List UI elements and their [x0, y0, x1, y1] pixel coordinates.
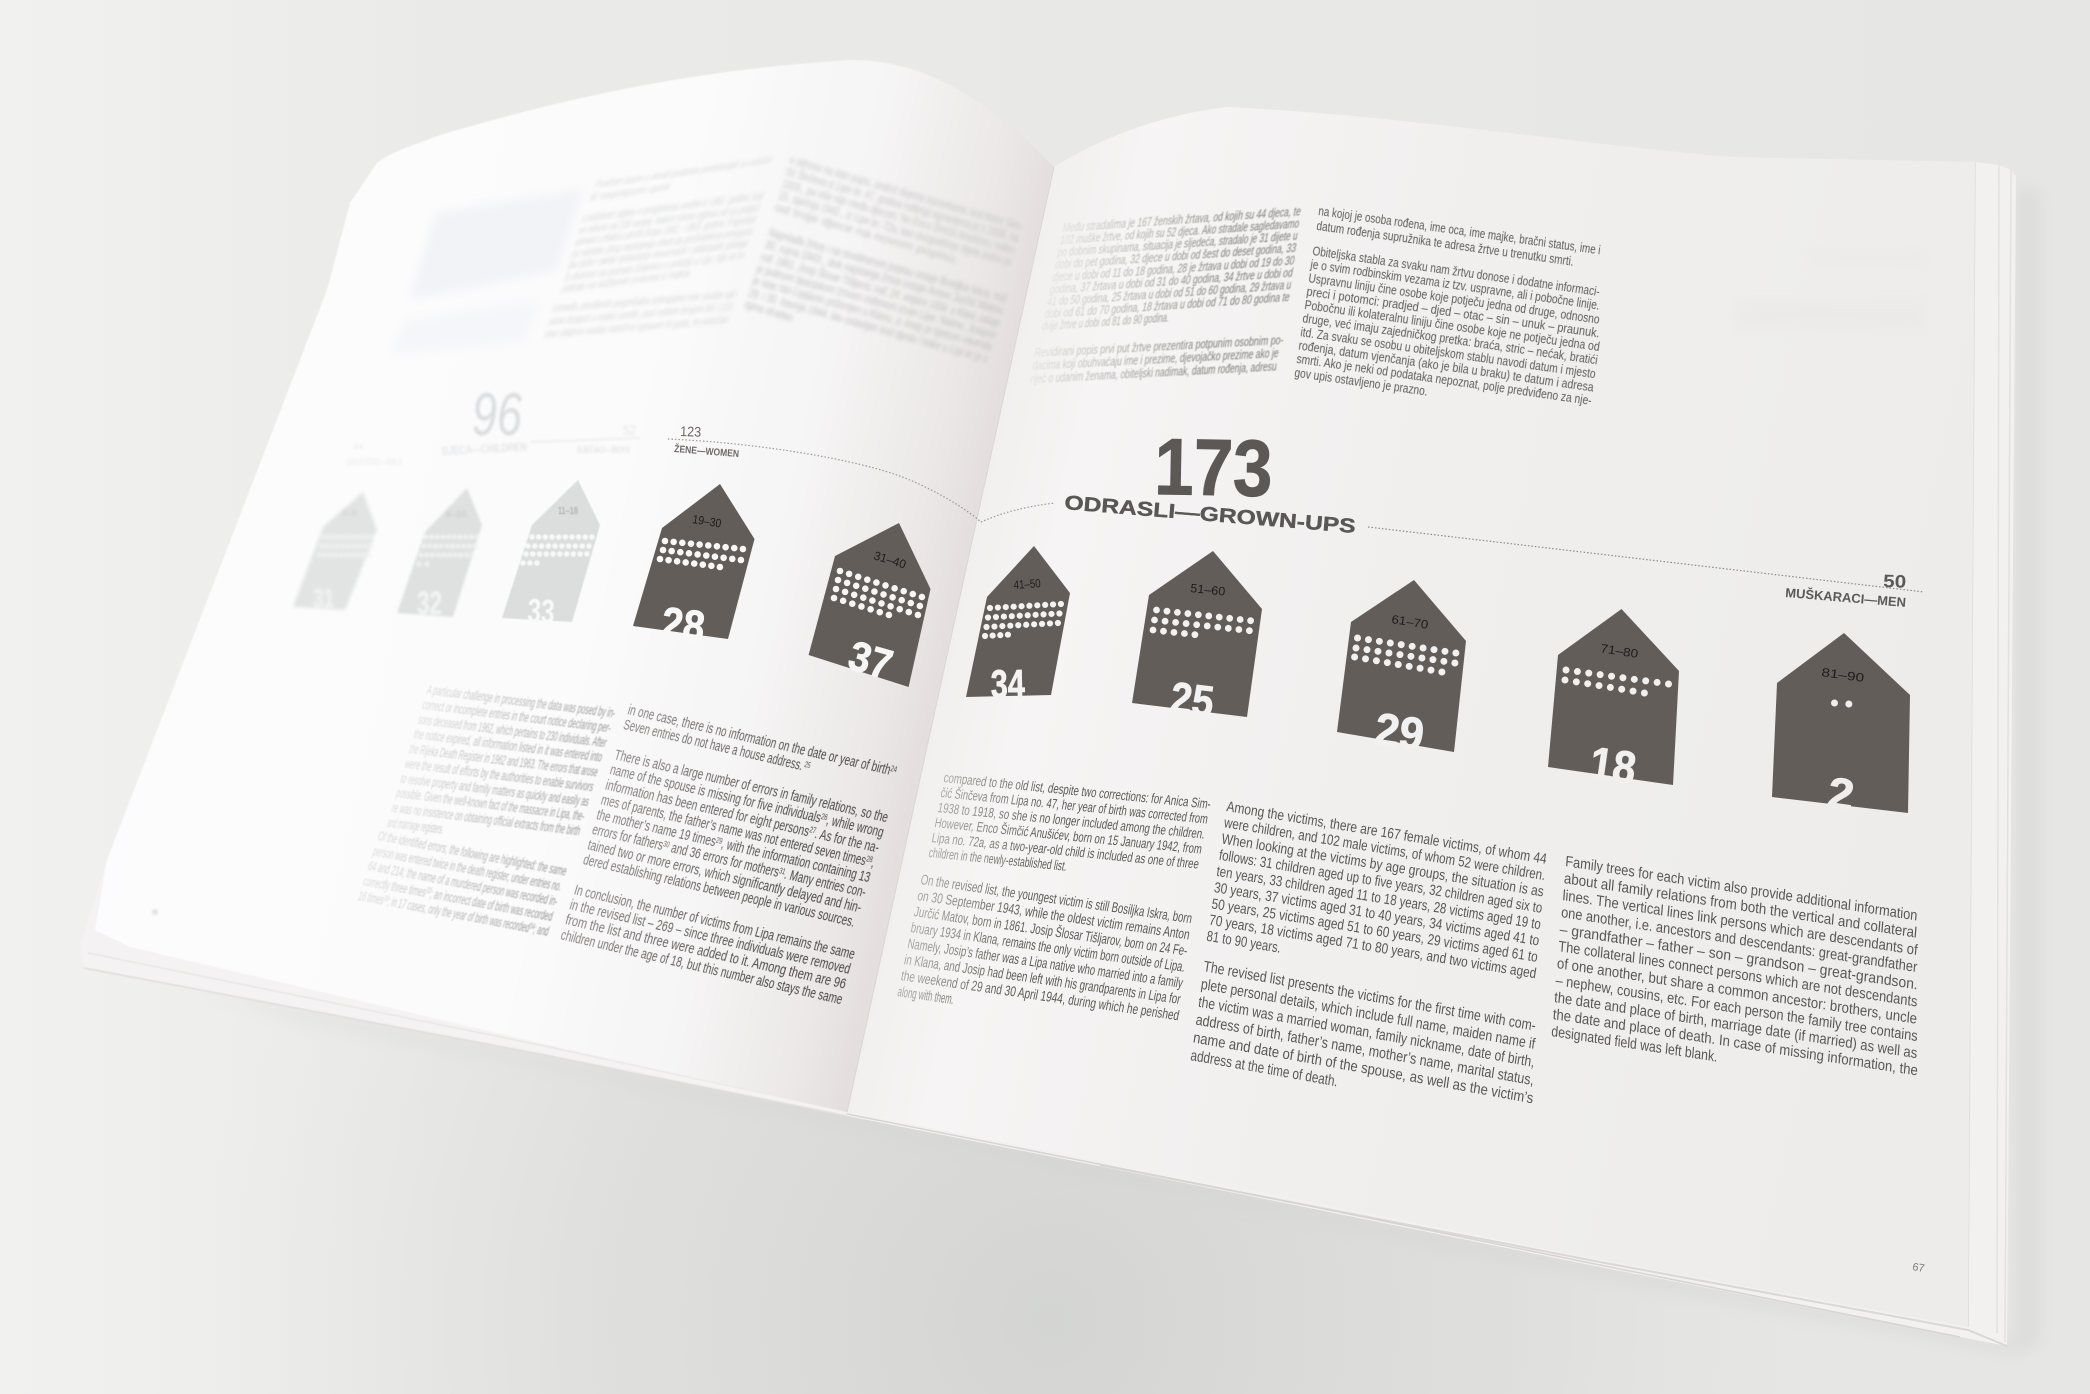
text block: right page column two, paragraph two: address at the time of death.: [1189, 1047, 1339, 1090]
text block: upper right page column one, paragraph one: dobi od 61 do 70 godina, 18 žrtava u dobi od 71 do 80 godina te: [1043, 290, 1291, 321]
text block: left page column two: 29: [715, 836, 724, 846]
house: ages 61-70, 29 victims: [1337, 580, 1466, 761]
text block: left page column two: 27: [808, 825, 817, 836]
text block: right page column one, paragraph one: compared to the old list, despite two corrections: for Anica Sim-: [942, 770, 1212, 812]
text block: upper right page column two, paragraph two: je o svim rodbinskim vezama iz tzv. uspravne, ali i pobočne linije.: [1309, 258, 1601, 313]
label: men: MUŠKARACI—MEN: [1785, 585, 1907, 610]
text block: upper right page column two, paragraph two: rođenja, datum vjenčanja (ako je bila u braku) te datum i adresa: [1298, 339, 1595, 395]
text block: right page column one, paragraph one: 1938 to 1918, so she is no longer included among the children.: [936, 800, 1206, 842]
text block: right page column one, paragraph two: bruary 1934 in Klana, remains the only victim born outside of Lipa.: [909, 920, 1187, 976]
label: women: ŽENE—WOMEN: [674, 442, 740, 460]
house: ages 31-40, 37 victims: 37: [844, 631, 898, 689]
text block: left page column two: the mother’s name 19 times: [595, 807, 772, 863]
text block: right page column three: one another, i.e. ancestors and descendants: great-grandfather: [1560, 904, 1918, 976]
text block: right page column one, paragraph one: Lipa no. 72a, as a two-year-old child is included as one of three: [930, 830, 1200, 872]
text block: right page column three: [1551, 853, 1931, 1097]
text block: blurred upper left column, paragraph three: [543, 287, 740, 341]
text block: blurred upper left column, paragraph three: ime ubijene osobe netočno upisano tri puta, te netočan: [543, 314, 730, 341]
text block: right page column one, paragraph two: On the revised list, the youngest victim is still Bosiljka Iskra, born: [919, 872, 1193, 927]
text block: upper right page column one, paragraph two: riječ o udanim ženama, obiteljski nadimak, datum rođenja, adresu: [1030, 359, 1278, 386]
house: ages 41-50, 34 victims: 41–50: [1013, 576, 1041, 592]
text block: right page column one, paragraph one: However, Enco Šimčić Anušićev, born on 15 January 1942, from: [933, 815, 1203, 857]
text block: blurred upper left column, paragraph two: što brže i lakše rješavanje imovinskih i obiteljskih pitanja.: [566, 237, 751, 272]
text block: blurred upper middle column, paragraph two: njima stradao.: [743, 297, 797, 325]
stat: 52 boys: 52: [623, 422, 636, 438]
spine crease: [847, 167, 1054, 1112]
heading: left-page totals, blurred: [347, 381, 640, 467]
text block: right page column two, paragraph one: follows: 31 children aged up to five years, 32 children aged six to: [1218, 848, 1543, 917]
house: ages 61-70, 29 victims: 29: [1372, 702, 1427, 761]
text block: left page column two: children under the age of 18, but this number also stays the same: [559, 927, 844, 1008]
house: ages 0-5, 31 victims: [293, 492, 377, 613]
text block: upper right page column one, paragraph one: [1041, 204, 1309, 333]
text block: left page column one, paragraph one: possible. Given the well-known fact of the massacre in Lipa, the-: [394, 786, 587, 824]
text block: upper right page column two, paragraph two: Pobočnu ili kolateralnu liniju čine osobe koje ne potječu jedna od: [1304, 298, 1601, 354]
text block: blurred upper left column, paragraph two: [560, 190, 765, 296]
text block: right page column two, paragraph two: plete personal details, which include full name, maiden name if: [1200, 976, 1537, 1053]
text block: left page column two: 30: [662, 840, 671, 850]
panel: left page: [95, 60, 1054, 1112]
text block: blurred left-page grey block: [391, 190, 583, 355]
stat: 123 women: [674, 423, 740, 460]
text block: right page column three: designated field was left blank.: [1551, 1023, 1718, 1066]
text block: upper right page column two, paragraph two: [1293, 244, 1609, 422]
text block: right page column one, paragraph two: on 30 September 1943, while the oldest victim remains Anton: [916, 888, 1191, 943]
house: ages 51-60, 25 victims: 51–60: [1190, 581, 1226, 599]
text block: blurred upper left column, paragraph two: u sudskom oglasu o proglašenju umrlim iz 1962. godine, koji: [580, 190, 765, 225]
house: ages 41-50, 34 victims: [966, 546, 1070, 707]
text block: right page column two, paragraph one: 81 to 90 years.: [1205, 929, 1282, 957]
text block: right page column two, paragraph one: [1205, 799, 1555, 999]
text block: blurred upper left column, paragraph one: [588, 153, 774, 204]
house: ages 71-80, 18 victims: 71–80: [1600, 641, 1640, 661]
text block: upper right page column one, paragraph one: 41 do 50 godina, 25 žrtava u dobi od 51 do 60 godina, 29 žrtava u: [1046, 278, 1293, 309]
text block: upper right page column one, paragraph one: 102 muške žrtve, od kojih su 52 djeca. Ako stradale sagledavamo: [1059, 217, 1301, 247]
text block: upper right page column two, paragraph two: preci i potomci: pradjed – djed – otac – sin – unuk – praunuk.: [1306, 285, 1601, 340]
house: ages 31-40, 37 victims: 31–40: [872, 548, 908, 572]
text block: upper right page column one, paragraph one: po dobnim skupinama, situacija je sljedeća, stradalo je 31 dijete u: [1056, 229, 1299, 260]
text block: right page column two, paragraph one: ten years, 33 children aged 11 to 18 years, 28 victims aged 19 to: [1215, 864, 1542, 933]
text block: right page column one, paragraph one: čić Šinčeva from Lipa no. 47, her year of birth was corrected from: [939, 785, 1209, 827]
rule under children total: [530, 438, 640, 442]
text block: right page column three: – grandfather – father – son – grandson – great-grandson.: [1559, 921, 1918, 993]
text block: left page column one, paragraph one: [385, 682, 618, 853]
text block: left page column two: [559, 702, 911, 1008]
text block: right page column three: the date and place of death. In case of missing information, the: [1552, 1006, 1919, 1080]
text block: upper right page column one, paragraph two: [1030, 333, 1285, 386]
text block: right page column one, paragraph two: the weekend of 29 and 30 April 1944, during which he perished: [899, 968, 1181, 1024]
text block: left page column one, paragraph two: 34: [529, 922, 536, 931]
text block: left page column two: In conclusion, the number of victims from Lipa remains the same: [572, 882, 857, 963]
text block: upper right page column two, paragraph one: datum rođenja supružnika te adresa žrtve u trenutku smrti.: [1316, 219, 1574, 269]
heading: 173 grown-ups: [1064, 422, 1356, 538]
text block: left page column two: tained two or more errors, which significantly delayed and hin-: [586, 837, 863, 916]
house: ages 11-18, 33 victims: 33: [527, 592, 556, 631]
house: ages 6-10, 32 victims: 6–10: [446, 509, 466, 519]
text block: left page column one, paragraph two: 16 times: [356, 888, 410, 912]
page number: blurred left folio: [152, 909, 158, 915]
text block: upper right page column two, paragraph two: druge, već imaju zajedničkog pretka: braća, stric – nećak, bratići: [1302, 312, 1599, 368]
label: boys: DJEČACI—BOYS: [577, 444, 630, 455]
text block: left page column two: . Many entries con-: [782, 867, 868, 901]
text block: right page column three: lines. The vertical lines link persons which are descendants of: [1562, 887, 1919, 959]
text block: left page column one, paragraph two: 32: [425, 886, 433, 896]
text block: right page column two, paragraph two: the victim was a married woman, family nickname, date of birth,: [1197, 994, 1536, 1071]
label: girls: DJEVOJČICE—GIRLS: [347, 456, 402, 467]
text block: left page column one, paragraph two: ; and: [532, 922, 551, 939]
text block: left page column one, paragraph one: correct or incomplete entries in the court notice declaring per-: [421, 697, 613, 735]
cast shadow of book: [200, 185, 2040, 1355]
text block: blurred upper middle column, paragraph one: [773, 152, 1024, 281]
text block: blurred upper left column, paragraph two: se odnosi na 230 osoba. Nakon isteka oglasa svi su podaci: [577, 201, 761, 237]
house: ages 19-30, 28 victims: 19–30: [692, 512, 723, 531]
page number: 67: 67: [1911, 1261, 1925, 1275]
text block: blurred upper left column, paragraph three: Između utvrđenih pogrešaka izdvajamo iste osobe upi-: [551, 287, 740, 315]
text block: upper right page column one, paragraph one: dvije žrtve u dobi od 81 do 90 godina.: [1041, 311, 1171, 333]
text block: blurred upper left column, paragraph one: Poseban izazov u obradi podataka predstavljali su netočni: [593, 153, 774, 191]
text block: blurred upper middle column, paragraph one: od troje djece na novom popisu.: [773, 200, 960, 267]
text block: left page column one, paragraph one: re was no insistence on obtaining official extracts from the birth: [390, 800, 582, 838]
house: ages 81-90, 2 victims: 2: [1825, 768, 1857, 821]
text block: upper right page column one, paragraph one: godina, 37 žrtava u dobi od 31 do 40 godina, 34 žrtve u dobi od: [1048, 266, 1294, 296]
house: ages 0-5, 31 victims: 31: [313, 583, 334, 613]
house: ages 19-30, 28 victims: [633, 484, 754, 652]
text block: left page column two: 26: [820, 812, 829, 822]
house: ages 19-30, 28 victims: 28: [659, 598, 707, 652]
text block: blurred upper left column, paragraph one: ili nepotpuni upisi: [588, 179, 673, 204]
text block: left page column two: dered establishing relations between people in various sources.: [581, 852, 857, 931]
text block: right page column three: of one another, but share a common ancestor: brothers, uncle: [1556, 955, 1918, 1028]
house: ages 31-40, 37 victims: [809, 523, 930, 689]
text block: blurred upper middle column, paragraph one: čić Šinčeva iz Lipe br. 47, godina rođenja ispravljena je s 1938. na: [784, 164, 1021, 245]
text block: blurred upper middle column, paragraph two: Najmlađa žrtva i na revidiranom popisu ostaje Bosiljka Iskra, rođ.: [767, 225, 1011, 306]
house: ages 81-90, 2 victims: [1772, 633, 1910, 821]
text block: left page column one, paragraph two: ; an incorrect date of birth was recorded: [428, 886, 555, 924]
text block: left page column two: and 36 errors for mothers: [666, 840, 781, 881]
text block: right page column two, paragraph two: [1189, 958, 1545, 1125]
text block: upper right page column two, paragraph one: na kojoj je osoba rođena, ime oca, ime majke, bračni status, ime i: [1318, 204, 1601, 257]
text block: blurred upper left column, paragraph three: sane dvaput u matici umrlih, pod rednim brojem 64 i 214,: [547, 300, 736, 328]
text block: right page column one, paragraph two: along with them.: [896, 984, 955, 1008]
house: ages 51-60, 25 victims: [1132, 551, 1262, 727]
text block: left page column one, paragraph two: Of the identified errors, the following are highlighted: the same: [376, 828, 569, 879]
house: ages 41-50, 34 victims: 34: [990, 662, 1026, 707]
panel: right page: [847, 107, 1975, 1327]
text block: left page column two: information has been entered for eight persons: [603, 777, 898, 860]
text block: right page column three: The collateral lines connect persons which are not descendants: [1558, 938, 1918, 1011]
text block: right page column two, paragraph one: 50 years, 25 victims aged 51 to 60 years, 29 victims aged 61 to: [1210, 896, 1539, 966]
text block: right page column two, paragraph two: address of birth, father’s name, mother’s name, marital status,: [1195, 1012, 1535, 1089]
text block: upper right page column one, paragraph one: dobi do pet godina, 32 djece u dobi od šest do deset godina, 33: [1054, 241, 1298, 272]
text block: left page column one, paragraph two: ; in 17 cases, only the year of birth was recorded: [386, 894, 532, 935]
text block: left page column two: , with the information containing 13: [719, 836, 872, 886]
text block: left page column one, paragraph one: to resolve property and family matters as quickly and easily as: [399, 771, 591, 809]
text block: right page column two, paragraph one: were children, and 102 male victims, of whom 52 were children.: [1222, 815, 1546, 884]
text block: left page column two: in the revised list – 269 – since three individuals were removed: [568, 897, 852, 978]
house: ages 81-90, 2 victims: 81–90: [1821, 665, 1866, 685]
text block: right page column three: about all family relations from both the vertical and collateral: [1563, 870, 1918, 942]
text block: left page column one, paragraph one: were the result of efforts by the authorities to enable survivors: [403, 756, 596, 794]
text block: left page column one, paragraph one: and marriage registers.: [386, 815, 446, 837]
text block: blurred upper left column, paragraph two: upisani u Maticu umrlih Rupa 1962. i 1963. godine. Pogreške: [573, 213, 758, 249]
stat: 173: 173: [1154, 422, 1273, 513]
text block: upper right page column two, paragraph two: smrti. Ako je neki od podataka nepoznat, polje predviđeno za nje-: [1296, 352, 1593, 408]
text block: left page column two: in one case, there is no information on the date or year of birth: [626, 702, 1016, 807]
text block: blurred upper middle column, paragraph two: je jedinom lipanjskom žrtvom rođenom izvan Lipe. Naime, Josipov: [754, 261, 998, 342]
text block: left page column two: Seven entries do not have a house address.: [621, 717, 900, 796]
text block: right page column three: – nephew, cousins, etc. For each person the family tree contains: [1555, 972, 1919, 1045]
text block: left page column one, paragraph one: sons deceased from 1962, which pertains to 230 individuals. After: [416, 712, 609, 750]
text block: upper right page column two, paragraph two: Uspravnu liniju čine osobe koje potječu jedna od druge, odnosno: [1308, 271, 1601, 327]
text block: blurred upper middle column, paragraph one: 1918., pa više nije među djecom. No Enco Šimčić Anušićev, rođen: [781, 176, 1017, 257]
stat: 50 men: [1785, 571, 1907, 610]
text block: left page column two: . As for the na-: [813, 826, 881, 856]
house: ages 11-18, 33 victims: 11–18: [558, 506, 578, 517]
text block: blurred upper middle column, paragraph two: [742, 225, 1011, 378]
house: ages 71-80, 18 victims: [1548, 609, 1679, 794]
text block: left page column one, paragraph two: [356, 828, 571, 939]
page stack under left page: [80, 860, 847, 1116]
text block: blurred upper middle column, paragraph two: 29. i 30. travnja 1944. bio ostavljen kod djeda i bake u Lipi te je s: [747, 285, 990, 366]
text block: left page column one, paragraph one: the notice expired, all information listed in it was entered into: [412, 727, 604, 765]
text block: left page column one, paragraph two: correctly three times: [361, 873, 483, 910]
text block: right page column one, paragraph two: in Klana, and Josip had been left with his grandparents in Lipa for: [903, 952, 1182, 1008]
text block: left page column two: There is also a large number of errors in family relations, so the: [612, 747, 890, 826]
text block: left page column one, paragraph two: person was entered twice in the death register, under entries no.: [371, 843, 564, 894]
text block: left page column two: 31: [778, 866, 787, 877]
text block: blurred upper middle column, paragraph two: je otac bio Lipljanin priženjen u Klanu, a Josip je tijekom vikenda: [750, 273, 994, 354]
text block: right page column one, paragraph two: [896, 872, 1200, 1040]
text block: right page column one, paragraph two: Jurčić Matov, born in 1861. Josip Šlosar Tišljarov, born on 24 Fe-: [913, 903, 1189, 960]
label: children: DJECA—CHILDREN: [441, 440, 527, 458]
house: ages 71-80, 18 victims: 18: [1587, 736, 1639, 794]
text block: upper right page column one, paragraph two: dacima koji obuhvaćaju ime i prezime, djevojačko prezime ako je: [1032, 346, 1280, 373]
text block: upper right page column one, paragraph two: Revidirani popis prvi put žrtve prezentira potpunim osobnim po-: [1034, 333, 1285, 360]
text block: blurred upper middle column, paragraph two: rođ. 1861. Josip Šlosar Tišljarov, rođ. 24. veljače 1934. u Klani, ostaje: [759, 249, 1003, 330]
text block: right page column one, paragraph two: Namely, Josip’s father was a Lipa native who married into a family: [906, 936, 1185, 992]
text block: left page column one, paragraph two: 64 and 214; the name of a murdered person was recorded in-: [366, 858, 560, 909]
text block: left page column one, paragraph one: the Rijeka Death Register in 1962 and 1963. The errors that arose: [408, 741, 600, 779]
text block: left page column two: 24: [890, 764, 898, 774]
text block: blurred upper left column, paragraph two: zistiralo na službenim izvacima iz matica.: [560, 267, 693, 296]
text block: right page column two, paragraph two: The revised list presents the victims for the first time with com-: [1202, 958, 1537, 1035]
stat: 123 women: 123: [680, 423, 702, 440]
text block: left page column two: , while wrong: [824, 813, 886, 841]
text block: blurred upper middle column, paragraph one: 15. siječnja 1942., iz Lipe br. 72a, kao dvogodišnje dijete jedno je: [777, 188, 1013, 269]
text block: blurred upper middle column, paragraph two: 30. rujna 1943., dok najstarija žrtva ostaje Anton Jurčić Matov,: [763, 237, 1006, 318]
text block: left page column two: ,: [869, 855, 877, 871]
text block: left page column two: errors for fathers: [590, 822, 698, 862]
house: ages 6-10, 32 victims: 32: [417, 585, 442, 621]
dotted connector: women to grown-ups: [668, 439, 1055, 522]
text block: right page column two, paragraph one: When looking at the victims by age groups, the situation is as: [1220, 832, 1545, 900]
text block: right page column two, paragraph one: 30 years, 37 victims aged 31 to 40 years, 34 victims aged 41 to: [1213, 880, 1540, 950]
text block: upper right page column two, paragraph two: Obiteljska stabla za svaku nam žrtvu donose i dodatne informaci-: [1312, 244, 1601, 299]
house: ages 51-60, 25 victims: 25: [1168, 673, 1216, 727]
dotted connector: grown-ups to men: [1368, 527, 1924, 592]
text block: upper right page column two, paragraph two: itd. Za svaku se osobu u obiteljskom stablu navodi datum i mjesto: [1300, 325, 1597, 381]
house: ages 11-18, 33 victims: [502, 480, 600, 631]
text block: left page column two: mes of parents, the father’s name was not entered seven times: [599, 792, 994, 899]
text block: left page column two: 28: [865, 855, 874, 865]
text block: left page column two: 25: [802, 760, 812, 770]
text block: right page column three: Family trees for each victim also provide additional information: [1565, 853, 1918, 925]
text block: right page column two, paragraph two: name and date of birth of the spouse, as well as the victim’s: [1192, 1029, 1535, 1107]
text block: right page column two, paragraph one: 70 years, 18 victims aged 71 to 80 years, and two victims aged: [1208, 913, 1537, 982]
page stack right and bottom: [847, 162, 2016, 1346]
house: ages 6-10, 32 victims: [397, 488, 482, 621]
label: grown-ups: ODRASLI—GROWN-UPS: [1064, 492, 1356, 538]
stat: 96 children: 96: [472, 381, 522, 448]
house: ages 61-70, 29 victims: 61–70: [1391, 612, 1430, 632]
text block: left page column one, paragraph two: 33: [383, 894, 390, 904]
page show-through marks: [1735, 250, 1925, 330]
text block: right page column one, paragraph one: children in the newly-established list.: [927, 845, 1068, 874]
text block: blurred upper left column, paragraph two: su nastale zbog nastojanja vlasti da preživjelima omoguće: [570, 225, 755, 260]
text block: right page column three: the date and place of birth, marriage date (if married) as well as: [1554, 989, 1918, 1062]
text block: left page column two: from the list and three were added to it. Among them are 96: [563, 912, 848, 993]
text block: right page column two, paragraph one: Among the victims, there are 167 female victims, of whom 44: [1225, 799, 1548, 868]
text block: upper right page column one, paragraph one: Među stradalima je 167 ženskih žrtava, od kojih su 44 djeca, te: [1061, 204, 1302, 235]
stat: 44 girls: 44: [353, 441, 363, 453]
text block: upper right page column one, paragraph one: djece u dobi od 11 do 18 godina, 28 je žrtava u dobi od 19 do 30: [1051, 253, 1296, 284]
text block: right page column one, paragraph one: [927, 770, 1212, 887]
stat: 50 men: 50: [1883, 571, 1907, 592]
text block: upper right page column two, paragraph two: gov upis ostavljeno je prazno.: [1294, 366, 1429, 398]
text block: left page column one, paragraph one: A particular challenge in processing the data was posed by in-: [425, 682, 617, 720]
text block: blurred upper middle column, paragraph one: u odnosu na stari popis, unatoč dvjema ispravkama: kod Anice Sim-: [788, 152, 1024, 233]
text block: left page column two: name of the spouse is missing for five individuals: [608, 762, 916, 848]
text block: blurred upper left column, paragraph two: S obzirom na poznatu činjenicu o pokolju u Lipi, nije se in-: [563, 249, 748, 284]
house: ages 0-5, 31 victims: 0–5: [342, 508, 357, 518]
